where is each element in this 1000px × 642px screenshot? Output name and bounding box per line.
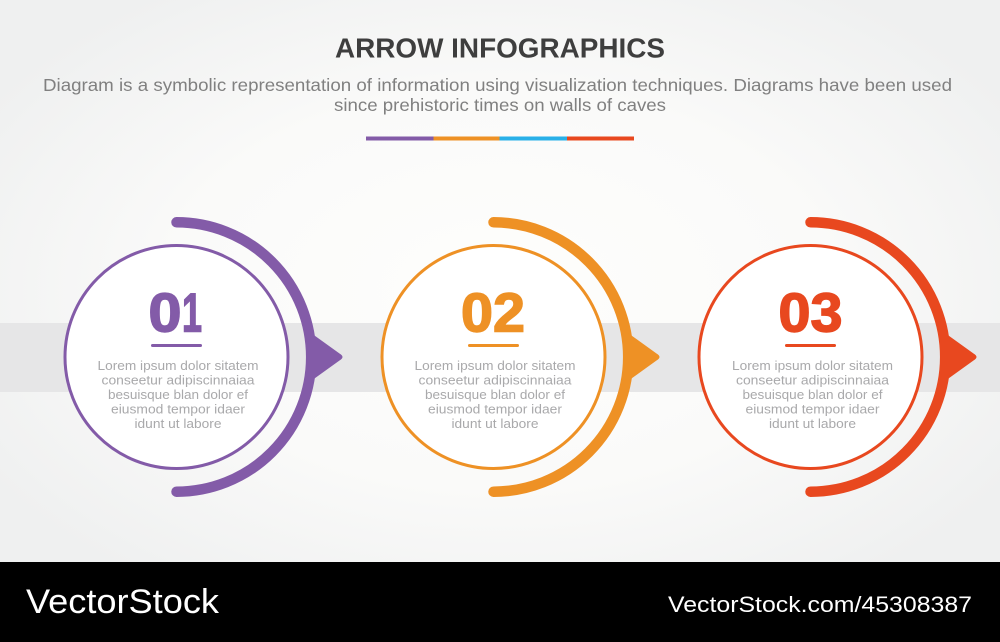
arc with arrow: purple bbox=[176, 222, 342, 492]
number: 03 bbox=[778, 282, 842, 344]
body text: eiusmod tempor idaer bbox=[746, 402, 880, 416]
footer bar bbox=[0, 562, 1000, 642]
arc with arrow: orange bbox=[494, 222, 660, 492]
circle bbox=[699, 246, 922, 468]
footer url: VectorStock.com/45308387 bbox=[668, 592, 972, 617]
body text: eiusmod tempor idaer bbox=[111, 402, 245, 416]
underline bbox=[468, 344, 519, 347]
body text: Lorem ipsum dolor sitatem bbox=[98, 359, 258, 373]
circle bbox=[382, 246, 605, 468]
number: 02 bbox=[461, 282, 525, 344]
body text: idunt ut labore bbox=[134, 417, 222, 431]
body text: conseetur adipiscinnaiaa bbox=[418, 374, 572, 388]
underline bbox=[151, 344, 202, 347]
subtitle bbox=[43, 75, 952, 115]
body text: eiusmod tempor idaer bbox=[428, 402, 562, 416]
body text: besuisque blan dolor ef bbox=[742, 388, 883, 402]
arc with arrow: red bbox=[810, 222, 976, 492]
step 01 bbox=[65, 222, 342, 492]
body text bbox=[732, 359, 893, 431]
body text: Lorem ipsum dolor sitatem bbox=[414, 359, 576, 373]
colour divider bbox=[366, 136, 634, 140]
subtitle: Diagram is a symbolic representation of information using visualization techniques. Diagrams have been used bbox=[43, 75, 952, 95]
body text: idunt ut labore bbox=[452, 417, 539, 431]
body text: Lorem ipsum dolor sitatem bbox=[732, 359, 893, 373]
body text bbox=[414, 359, 576, 431]
body text: besuisque blan dolor ef bbox=[108, 388, 249, 402]
number: 0 bbox=[148, 282, 182, 344]
body text: idunt ut labore bbox=[769, 417, 856, 431]
subtitle: since prehistoric times on walls of caves bbox=[334, 95, 666, 115]
body text: besuisque blan dolor ef bbox=[425, 388, 566, 402]
step 02 bbox=[382, 222, 660, 492]
horizontal grey band bbox=[0, 323, 1000, 392]
body text bbox=[98, 359, 258, 431]
underline bbox=[785, 344, 836, 347]
number bbox=[148, 282, 202, 344]
number: 1 bbox=[182, 282, 202, 344]
step 03 bbox=[699, 222, 976, 492]
body text: conseetur adipiscinnaiaa bbox=[102, 374, 255, 388]
body text: conseetur adipiscinnaiaa bbox=[736, 374, 889, 388]
circle bbox=[65, 246, 288, 468]
footer logo: VectorStock bbox=[26, 583, 220, 621]
title: ARROW INFOGRAPHICS bbox=[335, 32, 665, 63]
